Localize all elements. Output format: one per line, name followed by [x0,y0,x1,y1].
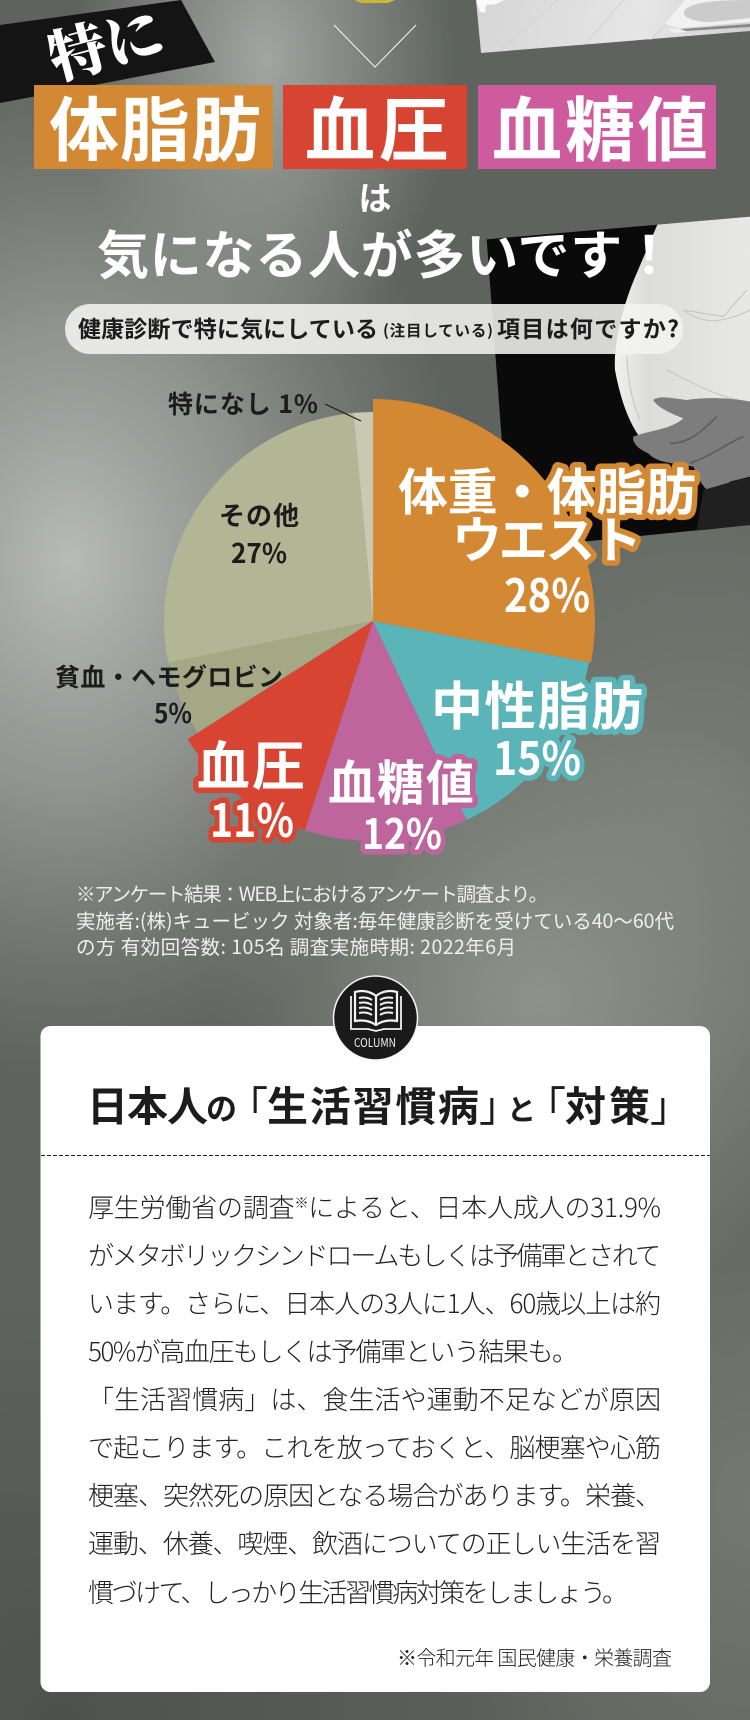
top yellow sliver [354,0,395,3]
icon: column badge [334,976,418,1060]
label: 貧血・ヘモグロビン 5%: 貧血・ヘモグロビン [55,658,283,694]
column body text: がメタボリックシンドロームもしくは予備軍とされて [88,1236,661,1273]
pie chart [164,399,595,841]
column heading: 生活習慣病 [267,1073,479,1133]
column body text: 50%が高血圧もしくは予備軍という結果も。 [88,1332,578,1369]
icon: column badge: COLUMN [354,1034,396,1051]
tag: 体脂肪: 体脂肪 [49,75,261,176]
column body text: によると、日本人成人の31.9% [308,1188,661,1225]
label: その他 27% [219,496,299,571]
chevron arrow [334,25,416,67]
footnote: ※令和元年 国民健康・栄養調査 [397,1642,672,1671]
column heading: の [206,1084,237,1129]
survey note: ※アンケート結果：WEB上におけるアンケート調査より。 [76,878,548,907]
column body text: 運動、休養、喫煙、飲酒についての正しい生活を習 [88,1524,661,1561]
column heading: 対策 [565,1073,650,1133]
column body text: 「生活習慣病」は、食生活や運動不足などが原因 [88,1380,661,1417]
leader line [325,404,361,421]
slice: その他 27% [164,413,373,663]
label: 血糖値 12%: 血糖値 [328,744,474,814]
column body text: 梗塞、突然死の原因となる場合があります。栄養、 [88,1476,661,1513]
tag: 血糖値: 血糖値 [492,75,708,176]
column body text: で起こります。これを放っておくと、脳梗塞や心筋 [88,1428,661,1465]
question pill: (注目している) [383,319,493,341]
label: その他 27%: 27% [231,532,287,571]
panel: column [40,1026,710,1692]
column heading: 「 [525,1073,566,1133]
label: 体重・体脂肪 ウエスト 28%: ウエスト [452,501,642,573]
label: その他 27%: その他 [219,496,299,533]
black banner: 特に [0,0,215,103]
label: 血糖値 12% [328,744,474,862]
tag: 血圧: 血圧 [305,75,449,176]
label: 体重・体脂肪 ウエスト 28% [398,453,696,626]
photo: belly [487,217,750,549]
headline: 気になる人が多いです！ [97,214,675,289]
label: 血圧 11%: 血圧 [197,725,305,801]
question pill: 健康診断で特に気にしている [78,310,378,344]
subheading: は: は [358,172,392,220]
survey note: の方 有効回答数: 105名 調査実施時期: 2022年6月 [76,931,516,960]
survey note: 実施者:(株)キュービック 対象者:毎年健康診断を受けている40〜60代 [76,905,674,934]
column heading: 「 [227,1073,268,1133]
label: 体重・体脂肪 ウエスト 28%: 28% [504,560,590,626]
column heading: と [507,1087,536,1129]
column body text: 厚生労働省の調査 [88,1188,295,1225]
column heading: 日本人 [87,1073,208,1133]
column body text: 慣づけて、しっかり生活習慣病対策をしましょう。 [88,1573,628,1610]
question pill [65,304,683,354]
photo: scale and foot [476,0,750,53]
survey note [76,878,674,960]
label: 中性脂肪 15%: 中性脂肪 [431,665,643,740]
column body text: います。さらに、日本人の3人に1人、60歳以上は約 [88,1284,661,1321]
question pill: 項目は何ですか? [497,310,679,344]
column heading: 」 [650,1073,691,1133]
column heading [87,1073,691,1133]
label: 貧血・ヘモグロビン 5% [55,658,283,731]
label: 血圧 11%: 11% [210,785,294,851]
label: 中性脂肪 15% [431,665,643,789]
label: 特になし 1%: 特になし 1% [168,385,318,421]
label: 貧血・ヘモグロビン 5%: 5% [154,692,192,731]
label: 中性脂肪 15%: 15% [493,723,581,789]
label: 血糖値 12%: 12% [362,801,442,862]
label: 体重・体脂肪 ウエスト 28%: 体重・体脂肪 [398,453,696,525]
column body text: ※ [294,1193,308,1213]
column body text [88,1188,661,1610]
column heading: 」 [479,1073,520,1133]
label: 血圧 11% [197,725,305,851]
